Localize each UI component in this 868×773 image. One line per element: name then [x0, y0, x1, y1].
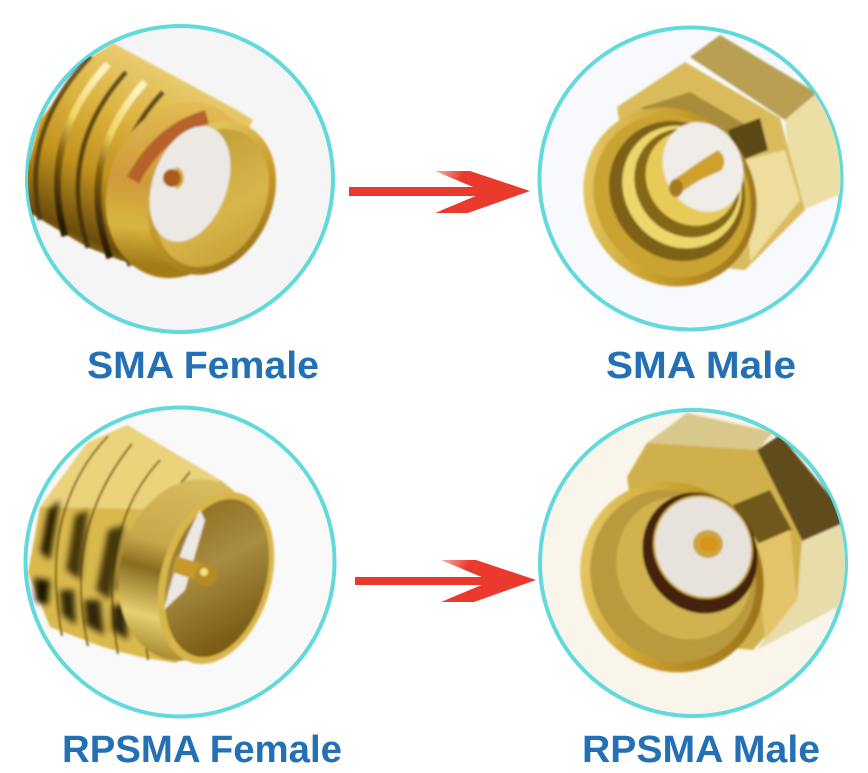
centre socket	[693, 530, 723, 558]
dark reflections	[34, 500, 132, 640]
mouth rim	[582, 106, 758, 288]
inner wall	[164, 498, 270, 658]
hex back: right face	[784, 94, 840, 210]
panel: SMA Male	[540, 28, 850, 330]
hex back: dark face	[757, 435, 850, 542]
mouth rim	[157, 491, 276, 666]
title: RPSMA Male: RPSMA Male	[582, 729, 820, 771]
panel: SMA Female	[25, 26, 333, 332]
inner wall	[590, 490, 757, 662]
nut front	[627, 443, 802, 650]
threaded body	[25, 43, 253, 277]
title: RPSMA Female: RPSMA Female	[62, 729, 342, 771]
copper band	[133, 117, 207, 180]
inner threads	[592, 116, 752, 278]
title: SMA Female: SMA Female	[87, 345, 319, 387]
dark recess	[641, 491, 759, 615]
panel: RPSMA Male	[540, 410, 850, 716]
centre contact	[163, 168, 182, 188]
arrow: RPSMA female to male	[355, 560, 536, 602]
collar	[104, 102, 233, 280]
hex back: top face	[690, 35, 817, 120]
centre pin	[669, 150, 724, 197]
hex back: lower face	[757, 520, 850, 650]
nut front	[617, 62, 805, 270]
centre pin	[172, 556, 217, 586]
title: SMA Male: SMA Male	[606, 345, 796, 387]
hex back: top face	[647, 413, 773, 452]
white insulator sliver	[164, 510, 205, 610]
mouth rim	[148, 122, 278, 276]
white insulator	[660, 120, 746, 214]
threaded body	[28, 425, 233, 663]
white insulator	[651, 494, 755, 601]
collar	[117, 479, 236, 662]
inner wall	[157, 128, 270, 268]
arrow: SMA female to male	[349, 171, 530, 213]
panel: RPSMA Female	[26, 408, 334, 716]
white insulator	[148, 124, 232, 244]
mouth rim	[578, 482, 765, 674]
